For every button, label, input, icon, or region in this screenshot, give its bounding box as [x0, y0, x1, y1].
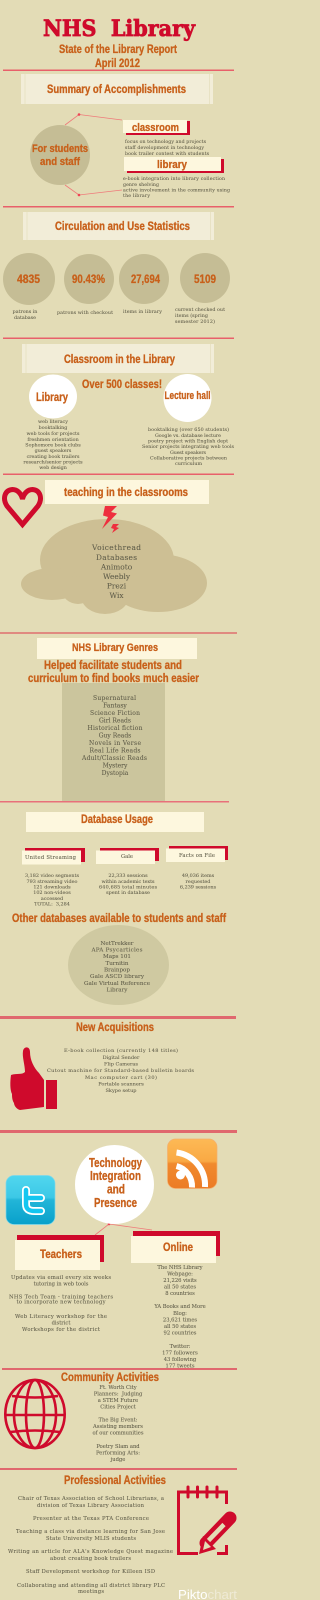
- panel: nhs library genres: [28, 638, 199, 801]
- heading: [26, 812, 204, 832]
- circle: technology integration and presence: and: [107, 1182, 125, 1196]
- stat: 4835: 4835: [17, 272, 40, 286]
- teachers label: [15, 1235, 104, 1270]
- stat: 27,694: [119, 254, 169, 315]
- community text: Poetry Slam and: [96, 1444, 140, 1450]
- stat: 5109: [175, 253, 230, 325]
- community text: The Big Event:: [99, 1418, 138, 1424]
- icon: notepad and pencil: [178, 1487, 230, 1554]
- classroom text: book trailer contest with students: [125, 151, 210, 157]
- online text: 177 followers: [162, 1350, 198, 1356]
- community text: Planners: Judging: [94, 1392, 143, 1398]
- teachers text: district: [52, 1320, 71, 1326]
- online text: Webpage:: [167, 1272, 193, 1278]
- heading panel: Summary of Accomplishments: [47, 84, 186, 96]
- lecture hall list: poetry project with English dept: [148, 438, 228, 444]
- professional text: Writing an article for ALA's Knowledge Quest magazine: [8, 1549, 173, 1555]
- genres list: Science Fiction: [90, 710, 140, 717]
- library text: genre shelving: [123, 182, 159, 188]
- stat: 27,694: 27,694: [131, 272, 160, 286]
- panel: circulation and use statistics: [3, 212, 230, 325]
- library list: web tools for projects: [27, 431, 80, 437]
- professional text: meetings: [78, 1589, 104, 1595]
- other databases list: Maps 101: [103, 954, 131, 960]
- other databases list: Gale ASCD library: [90, 974, 145, 980]
- professional text: Chair of Texas Association of School Librarians, a: [18, 1496, 164, 1502]
- teachers text: tutoring in web tools: [34, 1282, 89, 1288]
- library list: research/senior projects: [23, 460, 83, 466]
- circle: technology integration and presence: Presence: [94, 1196, 137, 1210]
- professional text: division of Texas Library Association: [37, 1503, 145, 1509]
- teachers label: Teachers: [40, 1247, 82, 1261]
- teachers text: Workshops for the district: [22, 1327, 101, 1333]
- circle: for students and staff: [30, 125, 90, 185]
- lecture hall list: Senior projects integrating web tools: [142, 444, 235, 450]
- online text: 8 countries: [165, 1291, 195, 1297]
- heading: Database Usage: [81, 814, 153, 826]
- online text: The NHS Library: [157, 1265, 203, 1271]
- gale stats: 640,685 total minutes: [99, 884, 157, 890]
- tools list: Databases: [96, 553, 137, 562]
- teachers text: to incorporate new technology: [16, 1300, 106, 1306]
- heading panel: [23, 212, 214, 240]
- genres list: Fantasy: [103, 702, 127, 710]
- community text: Cities Project: [100, 1404, 137, 1410]
- genres list: Adult/Classic Reads: [81, 755, 147, 762]
- acquisitions list: Portable scanners: [98, 1082, 144, 1088]
- acquisitions list: Flip Cameras: [104, 1062, 138, 1068]
- community text: Ft. Worth City: [99, 1385, 137, 1391]
- heading: [37, 638, 197, 659]
- panel: technology integration and presence: [6, 1139, 220, 1370]
- heading: [45, 480, 209, 504]
- community text: Assisting members: [92, 1424, 143, 1430]
- circle: lecture hall: Lecture hall: [164, 390, 210, 402]
- header: [43, 16, 196, 70]
- online text: all 50 states: [164, 1284, 196, 1290]
- facts on file stats: 6,239 sessions: [180, 884, 217, 890]
- tools list: [91, 543, 141, 600]
- heading: NHS Library Genres: [72, 642, 158, 654]
- stat: 5109: current checked out: [175, 307, 225, 313]
- subheading: [28, 660, 199, 685]
- lecture hall list: Google vs. database lecture: [155, 433, 221, 439]
- stat: 27,694: items in library: [123, 309, 162, 315]
- card: united streaming: [22, 848, 85, 864]
- library text: active involvement in the community using: [123, 188, 230, 194]
- online text: 43 following: [164, 1357, 197, 1363]
- online text: 177 tweets: [166, 1364, 195, 1370]
- gale stats: spent in database: [106, 890, 150, 896]
- united streaming stats: TOTAL: 3,284: [34, 902, 70, 908]
- acquisitions list: Digital Sender: [103, 1055, 140, 1061]
- circle: for students and staff: For students: [32, 143, 88, 155]
- other databases list: NetTrekker: [101, 941, 134, 947]
- connector lines: [95, 1223, 152, 1235]
- subheading: Helped facilitate students and: [44, 660, 182, 672]
- panel: database usage: [12, 812, 228, 1005]
- online text: Blog:: [173, 1311, 187, 1317]
- genres list: Dystopia: [102, 770, 129, 777]
- stat: 90.43%: [57, 254, 114, 316]
- professional text: Presenter at the Texas PTA Conference: [33, 1516, 149, 1522]
- other databases list: Library: [107, 988, 128, 994]
- acquisitions list: [47, 1047, 194, 1094]
- connector lines: [65, 113, 122, 196]
- professional text: [8, 1496, 173, 1595]
- library list: creating book trailers: [27, 454, 80, 460]
- panel: summary of accomplishments: [21, 74, 230, 199]
- library list: booktalking: [39, 425, 67, 431]
- other databases list: Turnitin: [105, 961, 129, 967]
- icon: heart: [5, 490, 40, 524]
- other databases list: Brainpop: [104, 968, 130, 974]
- genres list: Real Life Reads: [90, 748, 140, 754]
- teachers text: [9, 1275, 113, 1333]
- stat: 90.43%: 90.43%: [72, 272, 105, 286]
- online text: all 50 states: [164, 1324, 196, 1330]
- teachers text: NHS Tech Team - training teachers: [9, 1294, 113, 1300]
- community text: Performing Arts:: [96, 1450, 140, 1456]
- community text: judge: [110, 1457, 125, 1463]
- circle: technology integration and presence: Integration: [90, 1169, 141, 1183]
- icon: twitter: [6, 1176, 55, 1224]
- circle: library: Library: [36, 390, 68, 404]
- online label: [131, 1231, 220, 1263]
- card: united streaming: United Streaming: [25, 855, 77, 861]
- stat: 5109: 5109: [194, 272, 216, 286]
- other databases list: Gale Virtual Reference: [84, 981, 151, 987]
- genres list: Historical fiction: [88, 725, 143, 732]
- online text: YA Books and More: [153, 1304, 206, 1310]
- online text: 21,226 visits: [163, 1278, 197, 1284]
- genres list: Guy Reads: [99, 732, 131, 740]
- teachers text: Web Literacy workshop for the: [15, 1314, 107, 1320]
- library list: guest speakers: [35, 448, 72, 454]
- stat: 4835: [3, 253, 55, 321]
- classroom label: classroom: [132, 122, 179, 134]
- icon: thumbs up: [10, 1047, 57, 1110]
- lecture hall list: booktalking (over 650 students): [148, 426, 229, 433]
- united streaming stats: 102 non-videos: [33, 890, 71, 896]
- library text: e-book integration into library collection: [123, 176, 225, 182]
- professional text: Staff Development workshop for Killeen ISD: [26, 1569, 155, 1575]
- icon: lightning: [102, 506, 119, 533]
- genres list: Girl Reads: [99, 718, 131, 724]
- library label: library: [157, 159, 188, 171]
- subheading: curriculum to find books much easier: [28, 673, 199, 685]
- library text: the library: [123, 193, 150, 199]
- heading panel: [22, 344, 214, 373]
- heading panel: Circulation and Use Statistics: [55, 221, 190, 233]
- heading: teaching in the classrooms: [64, 487, 188, 499]
- online text: 92 countries: [164, 1330, 197, 1336]
- library list: freshmen orientation: [27, 437, 79, 443]
- community text: of our communities: [93, 1430, 144, 1436]
- cloud: [21, 519, 207, 614]
- lecture hall list: curriculum: [175, 461, 202, 467]
- tools list: Prezi: [107, 582, 127, 590]
- background: [0, 0, 237, 1600]
- stat: 90.43%: patrons with checkout: [57, 310, 113, 316]
- classroom text: [125, 139, 210, 157]
- acquisitions list: Skype setup: [106, 1088, 136, 1094]
- heading: Professional Activities: [64, 1473, 166, 1487]
- classroom text: focus on technology and projects: [125, 139, 207, 145]
- community text: [92, 1385, 144, 1463]
- genres list: Mystery: [103, 762, 128, 770]
- card: facts on file: Facts on File: [179, 853, 215, 859]
- card: gale: Gale: [121, 854, 133, 860]
- card: gale: [96, 848, 159, 864]
- facts on file stats: [180, 873, 217, 890]
- circle: technology integration and presence: [75, 1145, 154, 1224]
- panel: community activities: [5, 1370, 159, 1463]
- card: facts on file: [166, 846, 228, 862]
- library list: [23, 419, 83, 471]
- icon: rss: [168, 1139, 217, 1188]
- community text: a STEM Future: [98, 1398, 138, 1404]
- united streaming stats: 121 downloads: [33, 884, 71, 890]
- genres list: Novels in Verse: [89, 740, 141, 747]
- online text: 23,621 times: [163, 1318, 197, 1324]
- library list: web design: [39, 465, 67, 471]
- callout: over 500 classes: Over 500 classes!: [82, 377, 162, 391]
- panel: new acquisitions: [10, 1022, 194, 1110]
- online label: Online: [163, 1240, 193, 1254]
- date: April 2012: [95, 56, 140, 70]
- panel: teaching in the classrooms: [5, 480, 209, 614]
- professional text: State University MLIS students: [46, 1536, 136, 1542]
- tools list: Voicethread: [91, 543, 141, 552]
- united streaming stats: 3,182 video segments: [25, 873, 79, 879]
- facts on file stats: requested: [186, 879, 210, 885]
- library label: [124, 157, 224, 173]
- lecture hall list: Collaborative projects between: [150, 456, 227, 462]
- stat: 4835: database: [14, 315, 36, 321]
- other databases list: APA Psycarticles: [90, 948, 143, 954]
- genres list: [62, 683, 165, 801]
- united streaming stats: accessed: [41, 896, 63, 902]
- subtitle: State of the Library Report: [59, 42, 177, 56]
- library list: web literacy: [38, 419, 68, 425]
- professional text: Teaching a class via distance learning for San Jose: [16, 1529, 165, 1535]
- professional text: Collaborating and attending all district library PLC: [17, 1583, 165, 1589]
- professional text: about creating book trailers: [50, 1556, 131, 1562]
- teachers text: Updates via email every six weeks: [11, 1275, 111, 1281]
- heading panel: [21, 74, 213, 104]
- classroom text: staff development in technology: [125, 145, 204, 151]
- gale stats: [99, 873, 157, 896]
- acquisitions list: E-book collection (currently 148 titles): [64, 1047, 178, 1054]
- acquisitions list: Cutout machine for Standard-based bulletin boards: [47, 1068, 194, 1074]
- united streaming stats: [25, 873, 79, 908]
- panel: classroom in the library: [22, 344, 235, 471]
- circle: for students and staff: and staff: [40, 156, 80, 168]
- genres list: Supernatural: [93, 695, 136, 702]
- lecture hall list: [142, 426, 235, 467]
- united streaming stats: 793 streaming video: [26, 879, 78, 885]
- icon: globe: [5, 1380, 65, 1448]
- online text: [153, 1265, 206, 1370]
- stat: 5109: semester 2012): [175, 318, 215, 325]
- library text: [123, 176, 230, 199]
- other databases list: [68, 925, 169, 1005]
- tools list: Weebly: [103, 572, 131, 581]
- title: NHS Library: [43, 16, 196, 42]
- online text: Twitter:: [170, 1344, 191, 1350]
- tools list: Wix: [110, 591, 124, 600]
- library list: Sophomore book clubs: [25, 442, 81, 448]
- circle: technology integration and presence: Technology: [89, 1156, 142, 1170]
- gale stats: within academic texts: [102, 879, 155, 885]
- panel: professional activities: [8, 1473, 230, 1595]
- circle: library: [29, 374, 77, 418]
- heading panel: Classroom in the Library: [64, 354, 175, 366]
- heading: Community Activities: [61, 1370, 159, 1384]
- tools list: Animoto: [100, 562, 133, 572]
- lecture hall list: Guest speakers: [170, 450, 207, 456]
- stat: 4835: patrons in: [13, 309, 37, 315]
- acquisitions list: Mac computer cart (30): [85, 1074, 157, 1081]
- classroom label: [123, 120, 190, 135]
- circle: lecture hall: [164, 374, 212, 422]
- facts on file stats: 49,036 items: [182, 873, 215, 879]
- stat: 5109: items (spring: [175, 312, 208, 319]
- gale stats: 22,333 sessions: [108, 873, 148, 879]
- heading: New Acquisitions: [76, 1022, 154, 1034]
